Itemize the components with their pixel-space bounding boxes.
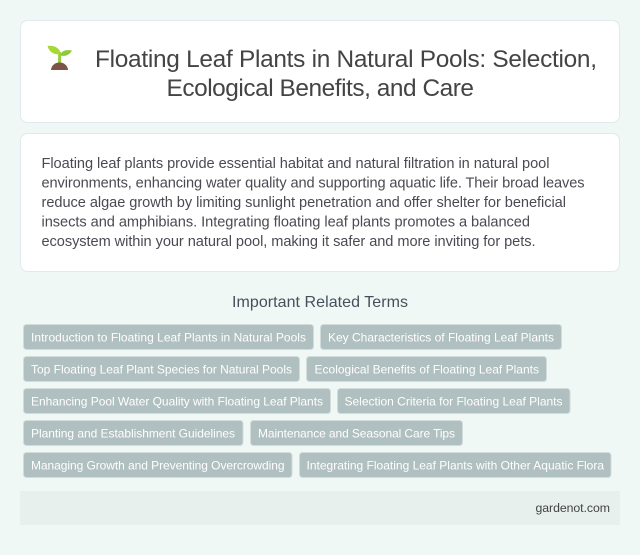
icon: seedling bbox=[48, 46, 72, 70]
text block: description bbox=[42, 156, 584, 250]
tag: Key Characteristics of Floating Leaf Plants bbox=[328, 330, 554, 344]
panel: related term tags bbox=[24, 324, 611, 478]
text block: description: reduce algae growth by limiting sunlight penetration and offer shelter for beneficial bbox=[42, 195, 566, 211]
tag: Maintenance and Seasonal Care Tips bbox=[258, 426, 455, 440]
tag bbox=[24, 452, 292, 478]
tag bbox=[24, 356, 300, 382]
title: Ecological Benefits, and Care bbox=[166, 75, 474, 102]
panel: title card bbox=[20, 20, 620, 122]
tag bbox=[300, 452, 611, 478]
tag: Top Floating Leaf Plant Species for Natural Pools bbox=[31, 362, 292, 376]
tag: Ecological Benefits of Floating Leaf Plants bbox=[314, 362, 539, 376]
heading: important related terms: Important Related Terms bbox=[232, 294, 408, 311]
footer bar bbox=[20, 491, 620, 525]
tag: Selection Criteria for Floating Leaf Plants bbox=[344, 394, 562, 408]
tag: Integrating Floating Leaf Plants with Other Aquatic Flora bbox=[306, 458, 604, 472]
tag bbox=[338, 388, 570, 414]
text block: description: environments, enhancing water quality and supporting aquatic life. Their broad leaves bbox=[42, 176, 584, 192]
title bbox=[95, 46, 597, 102]
tag bbox=[306, 356, 546, 382]
title: Floating Leaf Plants in Natural Pools: Selection, bbox=[95, 46, 597, 73]
text block: description: insects and amphibians. Integrating floating leaf plants promotes a balanced bbox=[42, 214, 530, 230]
tag bbox=[24, 420, 243, 446]
text block: description: ecosystem within your natural pool, making it safer and more inviting for pets. bbox=[42, 234, 536, 250]
panel: introduction text bbox=[20, 134, 620, 272]
tag: Introduction to Floating Leaf Plants in Natural Pools bbox=[31, 330, 306, 344]
tag bbox=[250, 420, 462, 446]
footer source text: gardenot.com bbox=[536, 501, 610, 515]
tag: Planting and Establishment Guidelines bbox=[31, 426, 235, 440]
tag bbox=[24, 388, 330, 414]
tag: Managing Growth and Preventing Overcrowding bbox=[31, 458, 284, 472]
tag: Enhancing Pool Water Quality with Floating Leaf Plants bbox=[31, 394, 323, 408]
tag bbox=[320, 324, 562, 350]
text block: description: Floating leaf plants provide essential habitat and natural filtration in natural pool bbox=[42, 156, 550, 172]
tag bbox=[24, 324, 314, 350]
